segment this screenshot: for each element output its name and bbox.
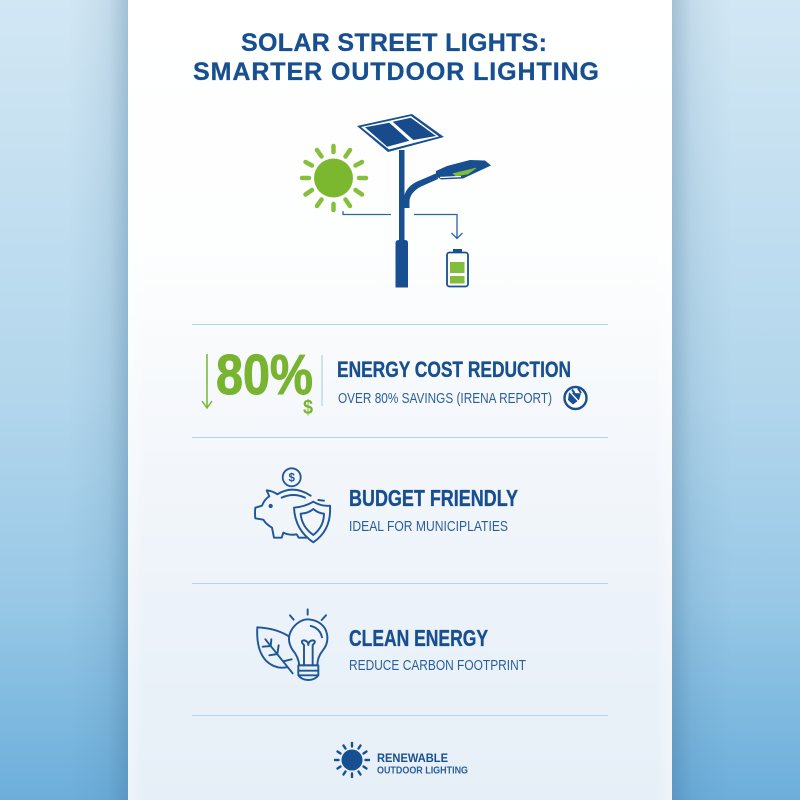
- title: [193, 29, 599, 86]
- text: reduce carbon footprint: REDUCE CARBON FOOTPRINT: [349, 657, 526, 674]
- heading: budget friendly: BUDGET FRIENDLY: [349, 485, 518, 511]
- text: outdoor lighting: OUTDOOR LIGHTING: [377, 766, 468, 776]
- icon: blue sun: [335, 743, 369, 777]
- icon: coin: [283, 468, 301, 486]
- icon: down arrow: [202, 354, 212, 408]
- panel: clean energy: [257, 609, 526, 680]
- stat: 80 percent: 80%: [216, 343, 313, 407]
- icon: solar panel: [357, 114, 444, 152]
- pole: [396, 150, 438, 288]
- dollar sign: $: [303, 397, 313, 419]
- lamp head: [436, 160, 491, 180]
- connector arrows: [343, 211, 462, 238]
- footer logo: [335, 743, 468, 777]
- heading: energy cost reduction: ENERGY COST REDUCTION: [337, 357, 571, 382]
- text: renewable: RENEWABLE: [377, 751, 448, 765]
- text: savings: OVER 80% SAVINGS (IRENA REPORT): [338, 390, 552, 407]
- panel: budget friendly: [255, 468, 518, 542]
- title: SMARTER OUTDOOR LIGHTING: [193, 58, 599, 86]
- icon: battery: [447, 249, 468, 286]
- icon: piggy bank with shield: [255, 490, 330, 542]
- title: SOLAR STREET LIGHTS:: [241, 29, 547, 57]
- heading: clean energy: CLEAN ENERGY: [349, 625, 488, 651]
- icon: sun: [302, 146, 366, 210]
- icon: leaf and light bulb: [257, 609, 327, 680]
- icon: plug badge: [564, 387, 586, 409]
- illustration: solar street light: [302, 114, 491, 288]
- text: ideal for municipalities: IDEAL FOR MUNICIPLATIES: [349, 518, 508, 535]
- icon: coin: $: [288, 472, 295, 484]
- dividers: [192, 324, 608, 716]
- panel: energy cost reduction: [202, 343, 586, 419]
